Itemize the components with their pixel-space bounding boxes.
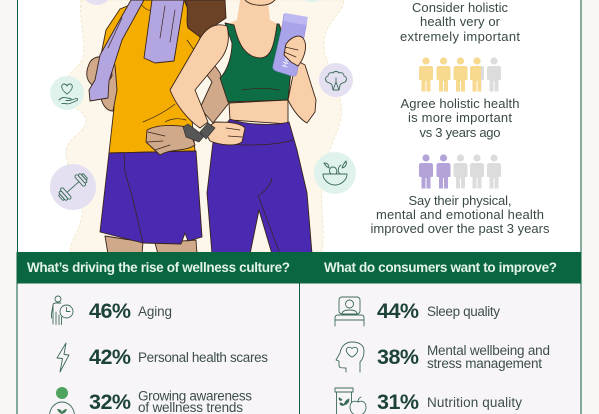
icon: heart in hand [50,76,84,110]
man's legs [105,236,197,254]
row: growing awareness [50,387,252,414]
woman's hand on hip [204,122,245,145]
row: aging: Aging [138,304,172,319]
wristbands [183,124,204,142]
row: aging: 46% [89,299,131,323]
icon: person sleeping in bed [335,297,364,326]
leggings [207,119,312,254]
row: sleep quality [335,297,500,326]
pictogram: four of five yellow people [419,57,501,92]
row: mental wellbeing: Mental wellbeing and [427,343,550,358]
row: mental wellbeing: 38% [377,345,419,369]
green crop top [220,23,292,102]
woman's right arm [288,60,316,123]
shirt creases [143,40,194,122]
row: mental wellbeing: stress management [427,356,542,371]
cream background blob [64,0,344,252]
stat: health improved: improved over the past 3 years [370,221,550,236]
hair [185,0,226,37]
neck and chest [226,0,292,102]
man's t-shirt [100,0,200,153]
row: personal health scares: Personal health scares [138,350,268,365]
man's forearm and hand [98,60,117,111]
midriff [229,100,288,124]
icon: salad bowl [314,152,356,194]
icon: dumbbell [50,164,96,210]
panel frame and divider [17,283,581,414]
icon: person with leaf [50,387,74,414]
icon: top mint circle [296,0,328,2]
man's hand on hip [146,125,195,155]
panel: illustration and statistics [18,0,581,254]
icon: top lavender circle [82,0,112,5]
stat: holistic health more important [400,96,520,140]
row: nutrition quality: Nutrition quality [427,395,522,410]
towel [89,0,144,101]
stat: holistic health more important: is more important [408,110,512,125]
hand on bottle [284,36,306,66]
stat: consider holistic health [400,0,520,44]
row: growing awareness: Growing awareness [138,388,252,404]
row: nutrition quality: 31% [377,390,419,414]
row: personal health scares: 42% [89,345,131,369]
row: growing awareness: 32% [89,390,131,414]
icon: broccoli [319,63,353,97]
illustration: woman [170,0,316,254]
stat: health improved: Say their physical, [408,193,512,208]
row: sleep quality: 44% [377,299,419,323]
row: sleep quality: Sleep quality [427,304,500,319]
heading band: What do consumers want to improve? [324,260,557,275]
pictogram: two of five purple people [419,154,501,188]
row: aging [52,296,172,324]
shirt collar [141,4,166,11]
row: personal health scares [57,343,268,372]
stat: holistic health more important: vs 3 years ago [420,125,500,140]
panel: what do consumers want to improve [300,252,582,414]
row: nutrition quality [335,388,522,414]
illustration: man [87,0,229,254]
panel: what's driving the rise of wellness culture [16,252,300,414]
stat: consider holistic health: extremely important [400,29,520,44]
stat: health improved: mental and emotional health [376,207,544,222]
icon: head with heart [336,342,364,372]
water bottle [273,13,308,76]
stat: consider holistic health: health very or [420,14,501,29]
heading band [300,252,582,284]
water bottle: Hello [280,47,294,69]
heading band [16,252,300,284]
icon: lightning bolt [57,343,69,372]
stat: holistic health more important: Agree holistic health [400,96,520,111]
woman's bent arm [170,25,228,128]
stat: health improved [370,193,550,236]
row: mental wellbeing [336,342,550,372]
icon: supplement jar and apple [335,388,366,414]
stat: consider holistic health: Consider holistic [412,0,508,15]
man's shorts [100,151,202,244]
icon: person with clock [52,296,73,324]
man's back arm [200,63,229,123]
heading band: What’s driving the rise of wellness culture? [27,260,290,275]
